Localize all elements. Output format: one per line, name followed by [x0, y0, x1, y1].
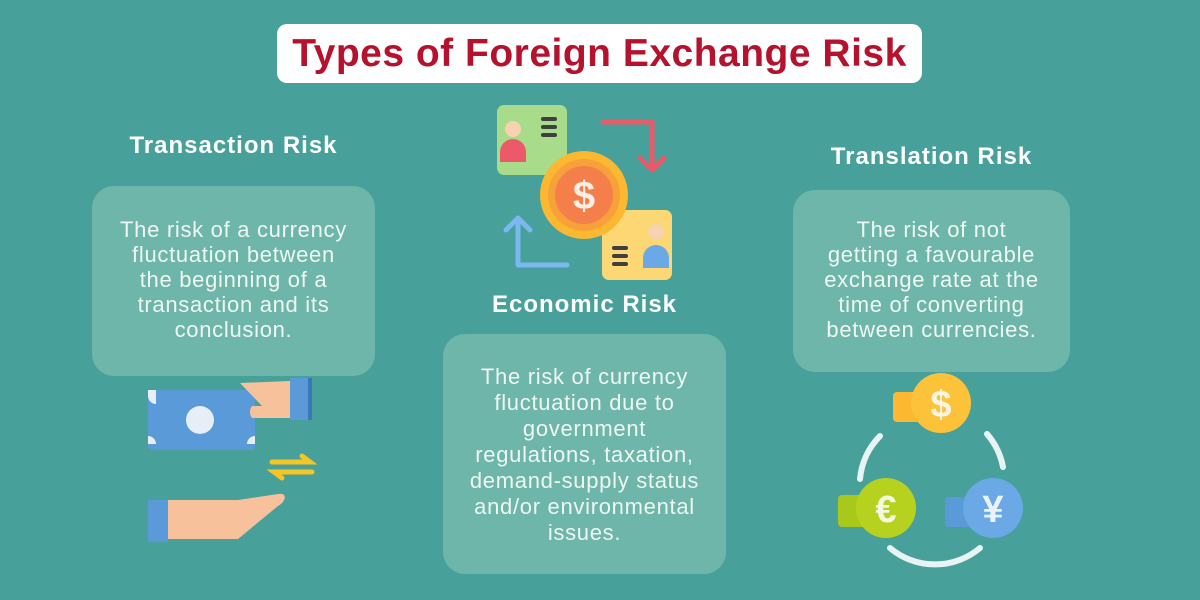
icon: currency exchange cards: [497, 105, 672, 280]
heading: translation risk: Translation Risk: [831, 143, 1032, 170]
icon: currency coins cycle: ¥: [982, 489, 1004, 531]
icon: hands exchanging money: [148, 378, 318, 542]
panel: translation risk: The risk of not: [857, 217, 1006, 242]
panel: economic risk: and/or environmental: [474, 494, 695, 519]
panel: translation risk: time of converting: [838, 292, 1025, 317]
icon: currency coins cycle: [838, 373, 1023, 568]
icon: currency exchange cards: $: [573, 174, 595, 218]
panel: economic risk: The risk of currency: [481, 364, 688, 389]
title: Types of Foreign Exchange Risk: [292, 32, 907, 75]
panel: economic risk: regulations, taxation,: [475, 442, 694, 467]
heading: transaction risk: Transaction Risk: [129, 132, 338, 159]
panel: economic risk: government: [523, 416, 646, 441]
panel: translation risk: between currencies.: [826, 317, 1037, 342]
panel: economic risk: [443, 334, 726, 574]
panel: translation risk: [793, 190, 1070, 372]
panel: translation risk: exchange rate at the: [824, 267, 1039, 292]
heading: economic risk: Economic Risk: [492, 291, 677, 318]
panel: economic risk: issues.: [548, 520, 621, 545]
panel: transaction risk: fluctuation between: [132, 242, 335, 267]
panel: economic risk: demand-supply status: [470, 468, 699, 493]
panel: transaction risk: conclusion.: [175, 317, 292, 342]
panel: transaction risk: The risk of a currency: [120, 217, 347, 242]
panel: transaction risk: the beginning of a: [140, 267, 327, 292]
panel: economic risk: fluctuation due to: [494, 390, 675, 415]
panel: translation risk: getting a favourable: [828, 242, 1035, 267]
panel: transaction risk: transaction and its: [138, 292, 329, 317]
icon: currency coins cycle: €: [875, 489, 897, 531]
panel: transaction risk: [92, 186, 375, 376]
icon: currency coins cycle: $: [930, 384, 952, 426]
title: [277, 24, 922, 83]
